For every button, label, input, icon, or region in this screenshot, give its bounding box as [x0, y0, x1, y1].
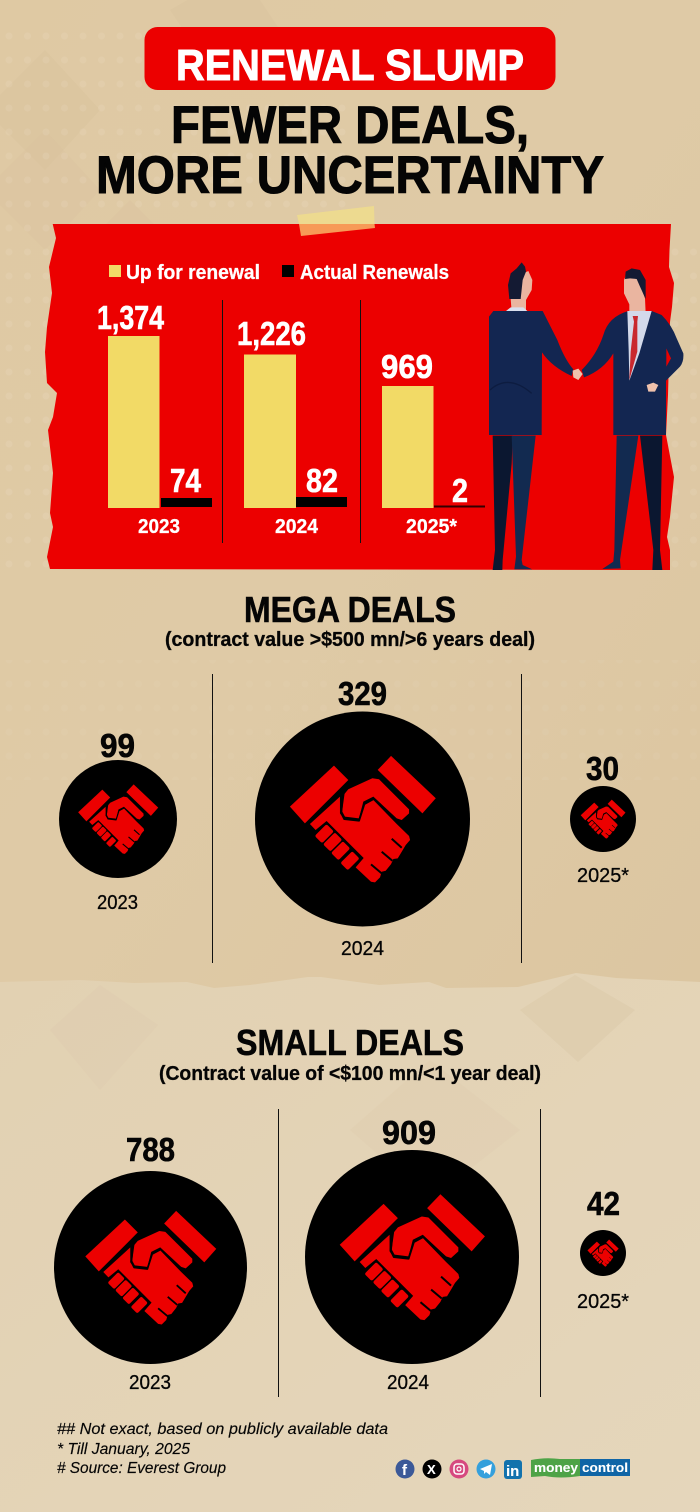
- bubble: mega 2023: 2023: [97, 892, 138, 914]
- bubble: small 2025: 42: [587, 1185, 620, 1222]
- heading: Small deals: SMALL DEALS: [236, 1022, 464, 1063]
- bar group: 2025: [381, 348, 485, 538]
- bar group: 2023: 74: [170, 462, 202, 499]
- footnotes: [57, 1421, 388, 1477]
- bubble: small 2023: [54, 1131, 247, 1394]
- bubble: small 2023: 788: [126, 1131, 175, 1168]
- background: lower torn paper: [0, 973, 700, 1512]
- panel: renewals chart: [45, 224, 683, 570]
- social icons: X: [427, 1462, 436, 1477]
- logo: moneycontrol: control: [582, 1460, 628, 1475]
- logo: moneycontrol: [531, 1458, 630, 1478]
- bubble: mega 2023: 99: [100, 727, 135, 764]
- bubble: mega 2025: [570, 750, 636, 887]
- illustration: two businessmen shaking hands: [489, 262, 683, 570]
- heading: Fewer deals, more uncertainty: MORE UNCERTAINTY: [96, 146, 604, 205]
- heading: Small deals: [159, 1022, 541, 1085]
- bubble: mega 2024: 2024: [341, 938, 384, 960]
- bubble: small 2024: 2024: [387, 1372, 429, 1394]
- legend: [109, 262, 449, 284]
- legend: Actual Renewals: [300, 262, 449, 284]
- bar group: 2024: 82: [306, 462, 338, 499]
- bubble: small 2025: 2025*: [577, 1291, 629, 1313]
- footnotes: ## Not exact, based on publicly available data: [57, 1421, 388, 1438]
- bubble: mega 2025: 2025*: [577, 865, 629, 887]
- footnotes: # Source: Everest Group: [57, 1460, 226, 1477]
- heading: Fewer deals, more uncertainty: [96, 96, 604, 205]
- bar group: 2025: 2: [452, 472, 468, 509]
- bubble: small 2025: [577, 1185, 629, 1313]
- bar group: 2024: [237, 315, 347, 538]
- bar group: 2025: 969: [381, 348, 433, 385]
- bubble: small 2024: 909: [382, 1114, 436, 1151]
- footnotes: * Till January, 2025: [57, 1441, 190, 1458]
- bar group: 2024: 2024: [275, 516, 319, 538]
- decorative tape: [297, 206, 375, 236]
- bubble: mega 2024: [255, 675, 470, 960]
- legend: Up for renewal: [126, 262, 260, 284]
- social icons: [396, 1460, 522, 1480]
- background: upper tan: [0, 0, 700, 1000]
- heading: Mega deals: (contract value >$500 mn/>6 years deal): [165, 628, 535, 651]
- social icons: f: [402, 1462, 408, 1479]
- bubble: mega 2025: 30: [586, 750, 619, 787]
- bubble: mega 2023: [59, 727, 177, 914]
- heading: Mega deals: MEGA DEALS: [244, 589, 456, 630]
- bar group: 2023: 2023: [138, 516, 180, 538]
- bar group: 2025: 2025*: [406, 516, 457, 538]
- bar group: 2023: [97, 299, 212, 538]
- bubble: small 2024: [305, 1114, 519, 1394]
- bar group: 2024: 1,226: [237, 315, 306, 352]
- bar group: 2023: 1,374: [97, 299, 165, 336]
- bubble: small 2023: 2023: [129, 1372, 171, 1394]
- social icons: in: [506, 1463, 519, 1480]
- heading: Small deals: (Contract value of <$100 mn/<1 year deal): [159, 1062, 541, 1085]
- logo: moneycontrol: money: [534, 1460, 579, 1475]
- heading: Mega deals: [165, 589, 535, 651]
- heading: Fewer deals, more uncertainty: FEWER DEALS,: [171, 96, 529, 155]
- bubble: mega 2024: 329: [338, 675, 387, 712]
- title badge: Renewal Slump: RENEWAL SLUMP: [176, 41, 524, 90]
